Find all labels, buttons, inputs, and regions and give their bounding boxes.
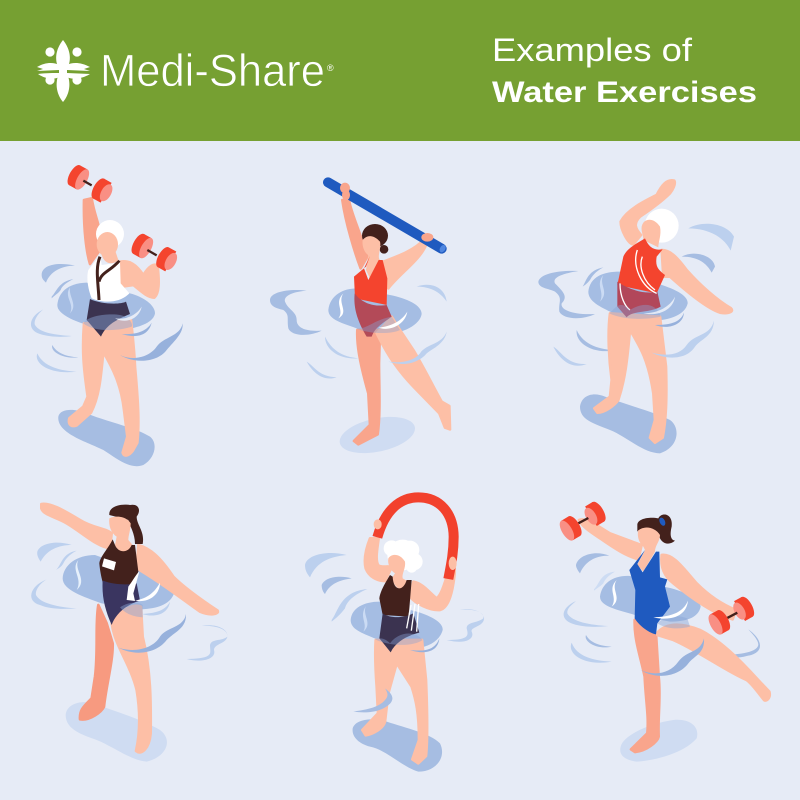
water ripples bbox=[31, 264, 155, 372]
figure 5: senior woman with red arched noodle bbox=[305, 497, 484, 772]
suit white panel bbox=[127, 572, 139, 601]
raised leg bbox=[657, 625, 770, 700]
ripples in front bbox=[609, 297, 714, 358]
dumbbell: bent arm bbox=[129, 232, 181, 274]
dumbbell: left bbox=[557, 499, 609, 543]
bent arm bbox=[120, 261, 159, 298]
right arm bbox=[137, 545, 218, 614]
title line 2: Water Exercises bbox=[492, 76, 757, 109]
water ripples bbox=[31, 543, 227, 661]
ponytail hair bbox=[637, 515, 675, 544]
floor shadow bbox=[353, 719, 442, 772]
face and neck bbox=[642, 220, 660, 247]
face and neck bbox=[637, 528, 660, 572]
red noodle bbox=[377, 497, 454, 579]
floor shadow bbox=[58, 410, 155, 466]
tinted submerged suit bbox=[617, 282, 661, 317]
hands bbox=[340, 183, 433, 242]
legs bbox=[354, 330, 380, 444]
straps bbox=[97, 257, 119, 300]
left arm bbox=[41, 504, 112, 548]
face bbox=[97, 232, 118, 257]
floor shadow bbox=[580, 394, 677, 453]
hair bbox=[96, 220, 124, 248]
left arm bbox=[579, 519, 642, 559]
standing leg bbox=[631, 620, 660, 752]
figure 3: senior woman swinging arms bbox=[538, 180, 734, 453]
left arm bbox=[342, 200, 367, 268]
floor shadow bbox=[66, 702, 167, 762]
icon: Medi-Share cross logo bbox=[37, 40, 90, 102]
raised arm bbox=[621, 180, 675, 244]
suit white stripes bbox=[407, 604, 419, 632]
tinted submerged suit bbox=[102, 581, 140, 625]
header banner bbox=[0, 0, 800, 141]
ripples in front bbox=[83, 307, 183, 361]
dumbbell: raised bbox=[65, 163, 116, 205]
neck bbox=[102, 250, 118, 263]
suit name patch bbox=[102, 558, 116, 570]
swimsuit bbox=[99, 539, 138, 585]
swimsuit bbox=[87, 299, 130, 337]
ripples in front bbox=[353, 634, 439, 712]
water ripples bbox=[305, 553, 484, 648]
ripples in front bbox=[641, 601, 704, 676]
figure 6: woman balancing on one leg with dumbbells bbox=[557, 499, 770, 762]
swimsuit bottom bbox=[379, 613, 419, 652]
legs bbox=[69, 320, 138, 455]
tinted submerged suit bbox=[354, 293, 392, 337]
left arm bbox=[365, 538, 392, 581]
suit white lines bbox=[620, 250, 657, 310]
back leg bbox=[80, 605, 113, 720]
raised arm bbox=[84, 198, 100, 264]
front leg bbox=[112, 606, 151, 752]
water ripples bbox=[538, 224, 734, 366]
red swimsuit bbox=[354, 256, 387, 305]
registered mark: ® bbox=[327, 63, 334, 73]
right arm bbox=[382, 240, 426, 288]
floor shadow bbox=[336, 411, 418, 459]
right arm bbox=[410, 563, 455, 610]
blue swimsuit bbox=[629, 550, 670, 634]
ripples in front bbox=[118, 583, 186, 653]
white top bbox=[87, 255, 129, 302]
water ripples bbox=[564, 553, 760, 663]
face and neck bbox=[109, 517, 133, 552]
face and neck bbox=[388, 555, 408, 589]
title line 1: Examples of bbox=[492, 32, 692, 68]
right arm bbox=[661, 555, 736, 619]
water ripples bbox=[270, 285, 447, 378]
floor shadow bbox=[620, 720, 697, 762]
figure 1: woman lifting dumbbells bbox=[31, 163, 183, 466]
ripples in front bbox=[356, 312, 447, 364]
dumbbell: right bbox=[706, 595, 757, 637]
figure 2: woman with blue noodle bar bbox=[270, 182, 450, 459]
blue noodle bbox=[328, 182, 447, 253]
red swimsuit bbox=[617, 238, 665, 293]
hair tie bbox=[658, 517, 667, 527]
figure 4: woman with braid and outstretched arms bbox=[31, 504, 227, 762]
braid and hair bbox=[109, 505, 143, 544]
hands bbox=[374, 519, 457, 570]
swimsuit top bbox=[379, 575, 412, 617]
logo wordmark: Medi-Share bbox=[100, 45, 325, 96]
curly hair bbox=[384, 540, 423, 573]
hair bbox=[645, 209, 679, 243]
legs bbox=[362, 640, 427, 763]
hair bbox=[362, 224, 388, 254]
legs bbox=[594, 313, 666, 443]
face and neck bbox=[362, 236, 380, 278]
extended arm bbox=[662, 250, 732, 313]
